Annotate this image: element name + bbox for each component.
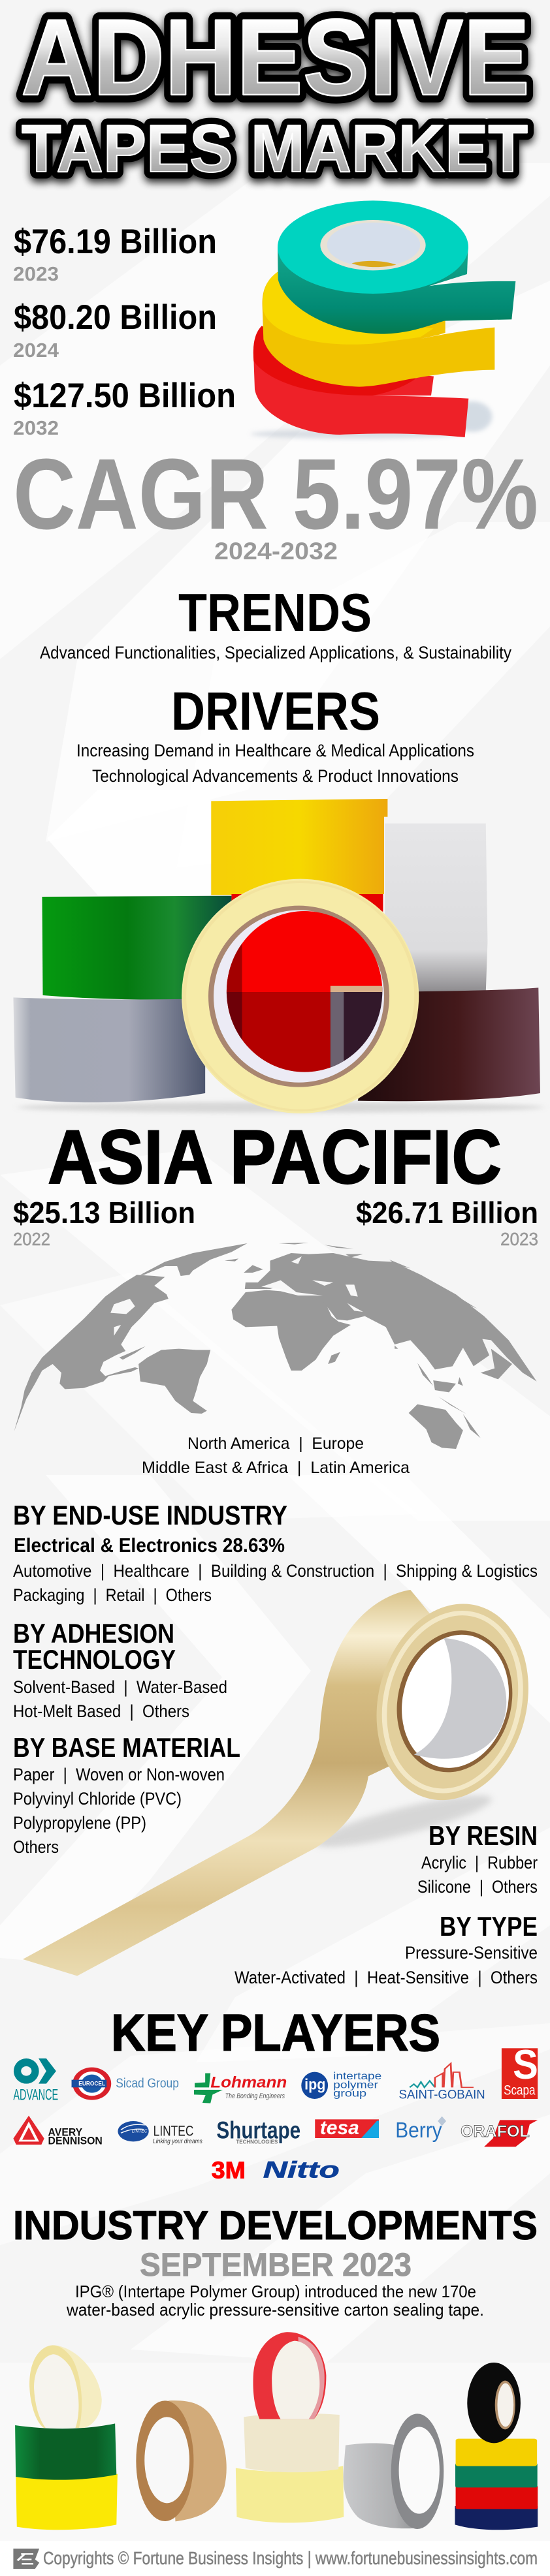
logo: Sicad Group — [72, 2068, 179, 2100]
segment: by base material: BY BASE MATERIAL — [13, 1732, 240, 1763]
segment: by end-use industry — [13, 1500, 538, 1605]
segment: by type: Pressure-Sensitive — [405, 1943, 538, 1963]
segment: by resin — [417, 1820, 538, 1897]
industry developments: water-based acrylic pressure-sensitive carton sealing tape. — [66, 2300, 484, 2320]
regional values: 2023 — [500, 1229, 538, 1249]
logo: Intertape Polymer Group: group — [333, 2088, 366, 2099]
company logos — [13, 2041, 538, 2184]
industry developments: IPG® (Intertape Polymer Group) introduced the new 170e — [75, 2282, 476, 2301]
tape stack: cream, green and yellow — [15, 2345, 118, 2530]
regional values: 2022 — [13, 1229, 50, 1249]
title — [21, 0, 530, 190]
CAGR headline: 2024-2032 — [214, 538, 338, 565]
market size values: 2032 — [13, 416, 59, 439]
trends — [40, 582, 511, 662]
market size values: 2024 — [13, 339, 59, 362]
regional values: $25.13 Billion — [13, 1196, 195, 1230]
logo: Avery Dennison: DENNISON — [48, 2134, 103, 2147]
logo: Lintec: Linking your dreams — [153, 2137, 202, 2145]
market size values: $80.20 Billion — [14, 298, 217, 337]
regional values — [13, 1196, 538, 1249]
logo: Sicad Group: EUROCEL — [78, 2080, 105, 2087]
segment: by end-use industry: Packaging | Retail | Others — [13, 1585, 212, 1605]
regional heading: Asia Pacific: ASIA PACIFIC — [48, 1114, 502, 1200]
logo: Intertape Polymer Group: polymer — [333, 2079, 378, 2090]
logo: Nitto: Nitto — [263, 2157, 340, 2183]
logo: Saint-Gobain — [399, 2064, 485, 2102]
logo: Avery Dennison: AVERY — [48, 2126, 82, 2138]
logo: tesa: tesa — [320, 2117, 359, 2139]
title: TAPES MARKET — [22, 111, 528, 186]
world map — [14, 1243, 537, 1449]
logo: Avery Dennison — [13, 2116, 103, 2147]
segment: by base material: Polyvinyl Chloride (PVC) — [13, 1789, 182, 1808]
company logos: Shurtape — [216, 2117, 300, 2144]
drivers — [76, 681, 474, 786]
logo: Lintec — [118, 2121, 202, 2145]
image: stacked coloured tape rolls — [250, 200, 515, 439]
title: TAPES MARKET — [22, 115, 528, 190]
drivers: DRIVERS — [171, 681, 380, 741]
segment: by base material — [13, 1732, 240, 1857]
segment: by adhesion technology: BY ADHESION — [13, 1618, 174, 1649]
segment: by adhesion technology — [13, 1618, 227, 1721]
logo: Saint-Gobain: SAINT-GOBAIN — [399, 2088, 485, 2102]
regional values: $26.71 Billion — [356, 1196, 538, 1230]
logo: Lohmann — [194, 2073, 287, 2103]
industry developments — [13, 2203, 538, 2320]
logo: Lintec: LINTEC — [132, 2128, 148, 2134]
segment: by adhesion technology: Hot-Melt Based | Others — [13, 1701, 189, 1721]
other regions list: North America | Europe — [187, 1435, 364, 1453]
other regions list: Middle East & Africa | Latin America — [142, 1459, 410, 1477]
logo: Shurtape — [216, 2117, 300, 2145]
logo: Scapa — [502, 2041, 538, 2099]
market size values: $127.50 Billion — [14, 377, 236, 415]
market size values: $76.19 Billion — [14, 223, 217, 261]
logo: Berry: Berry — [395, 2118, 442, 2142]
segment: by base material: Polypropylene (PP) — [13, 1813, 146, 1833]
logo: Advance — [13, 2058, 58, 2103]
segment: by end-use industry: Electrical & Electronics 28.63% — [14, 1534, 285, 1557]
image: gold adhesive tape roll — [23, 1590, 547, 1976]
segment: by end-use industry: BY END-USE INDUSTRY — [13, 1500, 287, 1530]
drivers: Technological Advancements & Product Innovations — [92, 766, 459, 786]
segment: by type — [235, 1911, 538, 1987]
trends: Advanced Functionalities, Specialized Applications, & Sustainability — [40, 643, 511, 662]
image: row of assorted tape rolls — [15, 2332, 538, 2530]
logo: Shurtape: TECHNOLOGIES — [236, 2139, 278, 2145]
drivers: Increasing Demand in Healthcare & Medical Applications — [76, 741, 474, 760]
logo: Sicad Group: Sicad Group — [116, 2075, 179, 2090]
logo: Intertape Polymer Group — [301, 2071, 381, 2099]
segment: by base material: Paper | Woven or Non-woven — [13, 1765, 225, 1784]
industry developments: SEPTEMBER 2023 — [140, 2246, 412, 2283]
logo: Berry — [395, 2117, 446, 2142]
company logos: ADVANCE — [13, 2086, 58, 2103]
icon: Fortune Business Insights logo — [13, 2549, 39, 2569]
trends: TRENDS — [178, 582, 372, 643]
tape stack: red, clear and yellow — [236, 2332, 344, 2522]
other regions list — [142, 1435, 410, 1477]
heading: key players: KEY PLAYERS — [111, 2004, 440, 2062]
logo: Lohmann: The Bonding Engineers — [225, 2092, 285, 2100]
tape: silver duct tape — [344, 2413, 444, 2529]
market size values — [13, 223, 236, 439]
logo: Lohmann: Lohmann — [210, 2073, 287, 2091]
industry developments: INDUSTRY DEVELOPMENTS — [13, 2203, 538, 2248]
tape stack: black and multicolour — [455, 2363, 538, 2530]
logo: 3M: 3M — [212, 2157, 246, 2184]
logo: Orafol — [461, 2120, 538, 2147]
image: group of packing tape rolls — [13, 799, 543, 1113]
tape: brown — [136, 2400, 227, 2521]
market size values: 2023 — [13, 262, 59, 285]
segment: by adhesion technology: Solvent-Based | Water-Based — [13, 1677, 227, 1697]
footer — [13, 2548, 538, 2569]
logo: Lintec: LINTEC — [154, 2123, 193, 2139]
logo: Intertape Polymer Group: ipg — [304, 2077, 325, 2093]
segment: by adhesion technology: TECHNOLOGY — [13, 1644, 176, 1675]
title: TAPES MARKET — [22, 111, 528, 186]
logo: Intertape Polymer Group: intertape — [333, 2071, 381, 2082]
segment: by base material: Others — [13, 1837, 59, 1857]
